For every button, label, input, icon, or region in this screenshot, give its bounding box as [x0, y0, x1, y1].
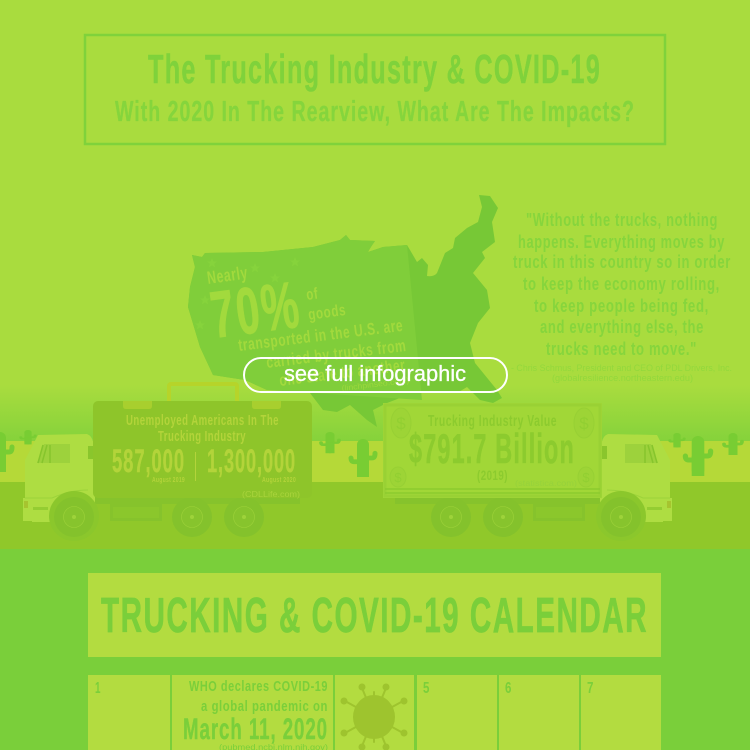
industry value stat: Trucking Industry Value	[428, 413, 557, 430]
cell 1: 1	[95, 680, 101, 697]
industry value stat: (2019)	[477, 467, 508, 483]
flag stars	[195, 257, 300, 330]
see full infographic button: see full infographic	[284, 361, 466, 386]
map text: 70 percent statistic: Nearly	[206, 262, 249, 288]
source: (CDLLife.com)	[242, 490, 300, 499]
quote attribution: - Chris Schmus, President and CEO of PDL Drivers, Inc.	[511, 363, 732, 374]
unemployment stat: August 2020	[262, 477, 296, 484]
suitcase handle	[169, 384, 237, 404]
calendar background	[0, 549, 750, 750]
suitcase latches	[123, 401, 281, 409]
right truck: $	[396, 414, 406, 433]
title frame	[85, 35, 665, 144]
cell 6: 6	[505, 680, 512, 697]
suitcase cargo box	[93, 401, 312, 498]
right truck: $	[579, 414, 589, 433]
unemployment stat: Unemployed Americans In The	[126, 412, 279, 429]
banknote cargo box	[383, 403, 602, 498]
truck body	[23, 434, 300, 541]
unemployment stat: 1,300,000	[207, 443, 296, 479]
map source: (linchpinseo.com)	[341, 376, 410, 393]
map silhouette	[188, 195, 502, 427]
cell 7	[581, 675, 661, 750]
source: (statistica.com)	[515, 479, 577, 488]
map of the US	[188, 195, 502, 427]
left truck	[23, 384, 312, 541]
map text: 70 percent statistic: one state to another	[278, 356, 407, 390]
quote attribution	[511, 363, 732, 384]
truck body	[395, 434, 672, 541]
unemployment stat	[112, 412, 296, 484]
industry value stat: $791.7 Billion	[409, 425, 575, 472]
cell: WHO pandemic declaration: March 11, 2020	[183, 713, 328, 746]
quote attribution: (globalresilience.northeastern.edu)	[552, 373, 693, 384]
right truck: $	[394, 470, 402, 485]
desert strip	[0, 441, 750, 482]
calendar row	[88, 675, 661, 750]
road	[0, 482, 750, 549]
map text: 70 percent statistic: carried by trucks from	[265, 336, 407, 372]
calendar heading	[88, 573, 661, 657]
flag overlay	[188, 235, 422, 400]
cell: WHO pandemic declaration	[172, 675, 333, 750]
cell: virus icon	[335, 675, 414, 750]
unemployment stat: August 2019	[152, 477, 185, 484]
sky gradient	[0, 385, 750, 443]
map text: 70 percent statistic: transported in the U.S. are	[237, 316, 404, 355]
unemployment stat: Trucking Industry	[158, 428, 246, 445]
cacti	[0, 430, 742, 477]
cell 7: 7	[587, 680, 594, 697]
map text: 70 percent statistic: 70%	[206, 267, 305, 352]
cell 5	[417, 675, 497, 750]
banknote dollar ornaments	[390, 408, 594, 487]
cell 5: 5	[423, 680, 430, 697]
cell: WHO pandemic declaration: WHO declares COVID-19	[189, 679, 328, 695]
right truck	[383, 403, 672, 541]
title block	[85, 35, 665, 144]
map text: 70 percent statistic	[206, 262, 407, 390]
map text: 70 percent statistic: of	[305, 285, 319, 304]
cell 6	[499, 675, 579, 750]
map text: 70 percent statistic: goods	[307, 302, 347, 324]
cell: WHO pandemic declaration: a global pandemic on	[201, 699, 328, 715]
see full infographic button	[244, 358, 507, 392]
quote	[511, 210, 732, 384]
unemployment stat: 587,000	[112, 443, 185, 479]
quote: trucks need to move."	[546, 339, 697, 359]
industry value stat	[409, 413, 575, 483]
right truck: $	[582, 470, 590, 485]
cell 1	[88, 675, 170, 750]
